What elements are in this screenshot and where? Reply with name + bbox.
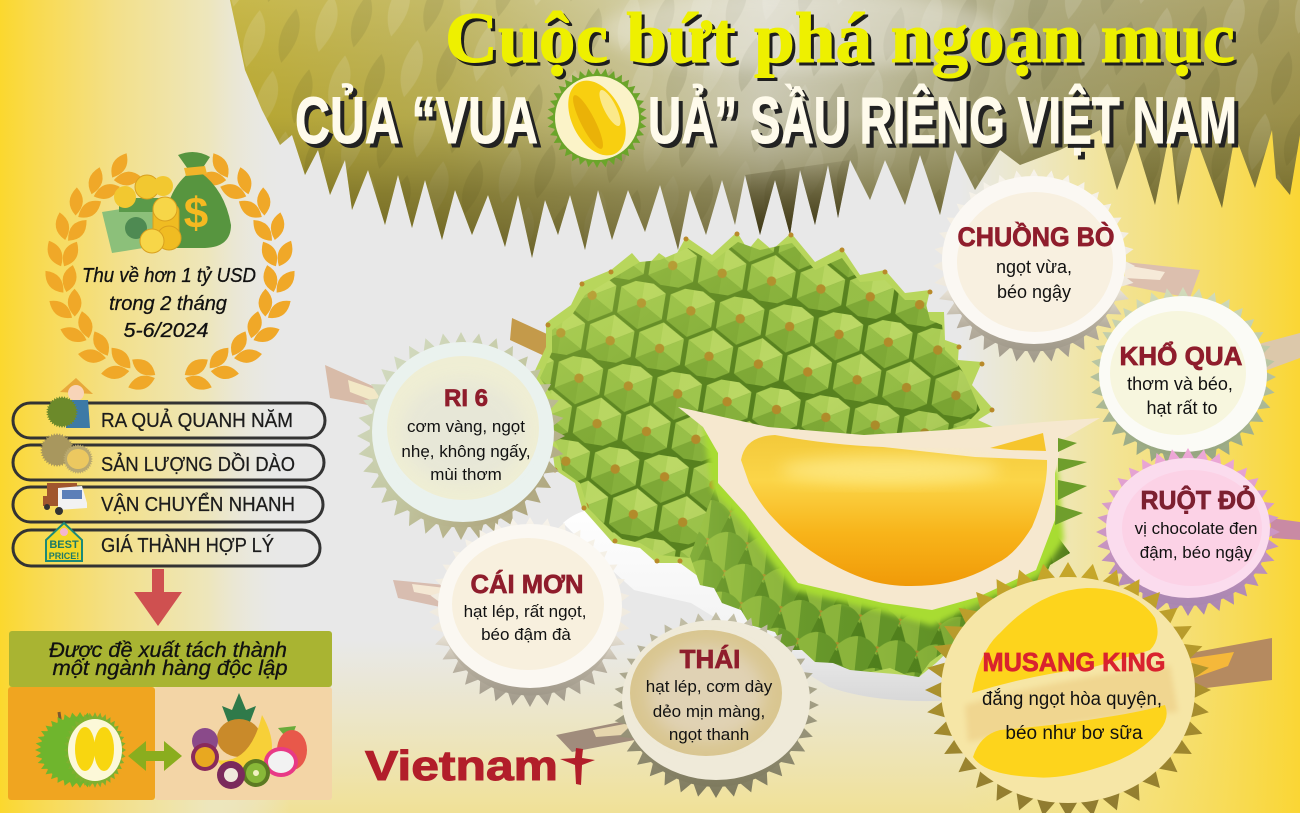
fruit: Ri 6: nhẹ, không ngấy, (401, 442, 531, 461)
green glow (703, 427, 1064, 626)
heading box (9, 631, 332, 687)
icon: best price tag: PRICE! (49, 551, 79, 561)
pill: ra quả quanh năm (13, 403, 325, 438)
icon: best price tag (46, 523, 82, 561)
icon: best price tag: BEST (49, 539, 79, 551)
icon: delivery truck (43, 483, 87, 515)
fruit: Cái Mơn (393, 517, 631, 707)
durian shell overhead (230, 0, 1300, 258)
husk cells (540, 242, 980, 558)
fruit: Cái Mơn: CÁI MƠN (470, 569, 584, 599)
fruit: Chuồng Bò: béo ngậy (997, 282, 1071, 302)
durian box (8, 687, 155, 800)
cream rind (678, 407, 1100, 610)
icon: farmer with durian (46, 378, 93, 428)
fruit: Thái (556, 612, 819, 798)
pill: vận chuyển nhanh: VẬN CHUYỂN NHANH (101, 493, 295, 516)
fruit: Ruột Đỏ: RUỘT ĐỎ (1140, 484, 1256, 515)
laurel leaves (44, 152, 296, 392)
advantages list (13, 378, 325, 566)
revenue text: 5-6/2024 (124, 320, 208, 342)
flesh sliver (990, 433, 1046, 451)
fruit: Ri 6: RI 6 (444, 385, 488, 412)
icon: durian letter Q (547, 68, 647, 168)
fruit: Khổ Qua: hạt rất to (1146, 398, 1218, 418)
fruit: Khổ Qua: KHỔ QUA (1120, 341, 1243, 371)
fruit: Musang King: đắng ngọt hòa quyện, (982, 688, 1162, 710)
fruit: Ri 6: cơm vàng, ngọt (407, 417, 525, 436)
pill: sản lượng dồi dào (13, 445, 324, 480)
plate under durian (563, 505, 1010, 701)
heading box: một ngành hàng độc lập (52, 657, 288, 680)
lower husk spikes (690, 480, 1070, 677)
fruit: Khổ Qua: thơm và béo, (1127, 374, 1233, 394)
fruit: Chuồng Bò (933, 169, 1200, 363)
title line 1: Cuộc bứt phá ngoạn mục (445, 0, 1235, 78)
fruit: Thái: THÁI (680, 644, 740, 674)
arrow: down (134, 569, 182, 626)
icon: money bag and coins (102, 152, 231, 253)
stem (510, 318, 560, 360)
revenue text: Thu về hơn 1 tỷ USD (82, 265, 256, 287)
fruit: Musang King (925, 562, 1272, 813)
fruit: Ruột Đỏ: đậm, béo ngậy (1140, 543, 1253, 562)
fruit: Cái Mơn: béo đậm đà (481, 625, 571, 644)
revenue text: trong 2 tháng (109, 293, 227, 315)
fruit: Thái: dẻo mịn màng, (653, 702, 765, 721)
fruit: Thái: ngọt thanh (669, 725, 749, 744)
main durian (510, 232, 1100, 677)
fruit: Ri 6 (325, 332, 565, 540)
small right spikes (1055, 438, 1087, 525)
flesh highlight (780, 456, 1000, 484)
fruit: Chuồng Bò: ngọt vừa, (996, 257, 1072, 277)
fruit: Ri 6: mùi thơm (430, 465, 502, 484)
yellow flesh (741, 435, 1047, 586)
other fruits box (155, 687, 332, 800)
spike tips (532, 232, 994, 564)
logo: Vietnam+: Vietnam (365, 742, 558, 789)
icon: fruits (191, 693, 307, 789)
pill: sản lượng dồi dào: SẢN LƯỢNG DỒI DÀO (101, 452, 295, 476)
icon: money bag and coins: $ (184, 189, 208, 238)
fruit: Musang King: béo như bơ sữa (1005, 723, 1143, 744)
fruit: Cái Mơn: hạt lép, rất ngọt, (464, 602, 586, 621)
pill: vận chuyển nhanh (13, 487, 323, 522)
fruit: Chuồng Bò: CHUỒNG BÒ (958, 221, 1114, 252)
icon: durian pair (40, 433, 93, 474)
pill: giá thành hợp lý: GIÁ THÀNH HỢP LÝ (101, 534, 274, 557)
icon: durian (35, 712, 126, 788)
green husk (532, 232, 1070, 677)
arrow: double (128, 741, 182, 771)
fruit: Ruột Đỏ: vị chocolate đen (1135, 519, 1257, 538)
fruit: Ruột Đỏ (1096, 448, 1300, 616)
title (295, 0, 1237, 168)
laurel wreath with revenue (44, 152, 296, 392)
pill: ra quả quanh năm: RA QUẢ QUANH NĂM (101, 409, 293, 432)
fruit: Musang King: MUSANG KING (982, 647, 1166, 677)
panel: proposal (8, 631, 332, 800)
fruit: Thái: hạt lép, cơm dày (646, 677, 773, 696)
revenue text (82, 265, 256, 342)
fruit: Khổ Qua (1090, 287, 1300, 467)
title line 2 left: CỦA “VUA (295, 83, 538, 157)
heading box: Được đề xuất tách thành (49, 639, 287, 662)
pill: giá thành hợp lý (13, 530, 320, 566)
